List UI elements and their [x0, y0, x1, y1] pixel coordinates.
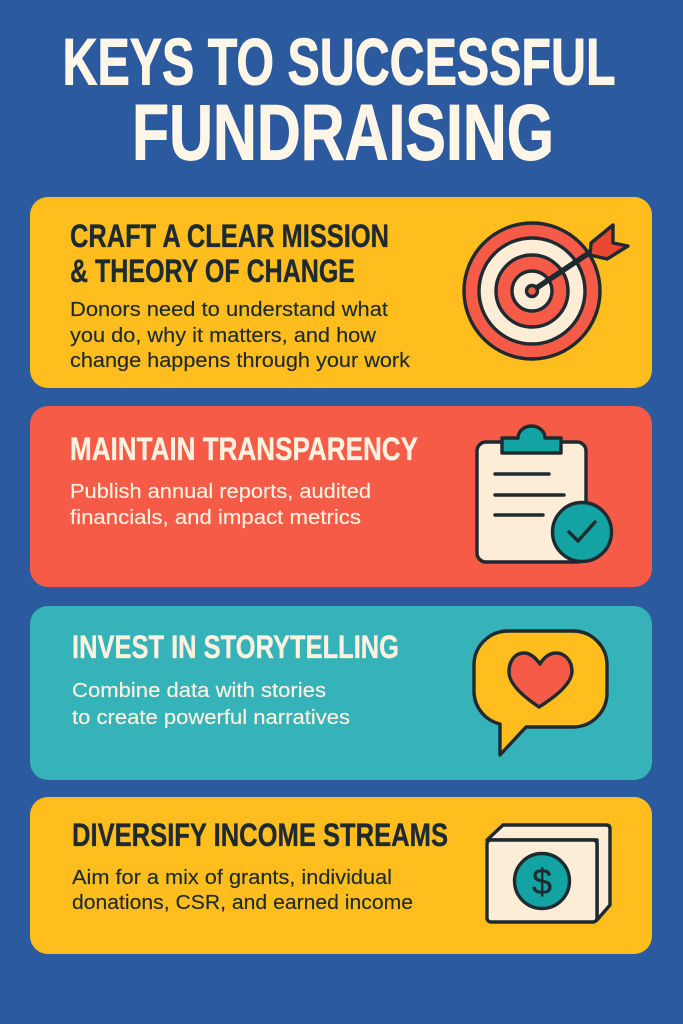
text: income streams description: Aim for a mix of grants, individual — [72, 867, 392, 889]
text: clear mission description: change happens through your work — [70, 350, 411, 372]
text: transparency description: financials, and impact metrics — [70, 507, 361, 529]
text: storytelling description: Combine data with stories — [72, 680, 326, 702]
panel: clear mission — [30, 197, 652, 388]
text: clear mission description: you do, why it matters, and how — [70, 325, 377, 347]
text: storytelling description: to create powerful narratives — [72, 707, 350, 729]
icon: clipboard with check — [477, 426, 612, 562]
text: storytelling description — [72, 680, 350, 729]
heading: clear mission: & THEORY OF CHANGE — [70, 253, 355, 289]
icon: speech bubble with heart — [474, 631, 607, 755]
text: income streams description: donations, CSR, and earned income — [72, 892, 413, 914]
heading: clear mission — [70, 218, 389, 289]
heading: clear mission: CRAFT A CLEAR MISSION — [70, 218, 389, 254]
panel: storytelling — [30, 606, 652, 780]
icon: banknote stack with dollar: $ — [532, 861, 552, 902]
panel: income streams — [30, 797, 652, 954]
icon: banknote stack with dollar — [487, 825, 610, 922]
text: clear mission description: Donors need to understand what — [70, 299, 388, 321]
text: transparency description — [70, 481, 371, 529]
heading: storytelling: INVEST IN STORYTELLING — [72, 629, 399, 665]
heading: transparency: MAINTAIN TRANSPARENCY — [70, 431, 418, 467]
text: income streams description — [72, 867, 413, 914]
text: clear mission description — [70, 299, 411, 372]
heading: income streams: DIVERSIFY INCOME STREAMS — [72, 817, 448, 853]
title — [62, 24, 616, 176]
text: transparency description: Publish annual reports, audited — [70, 481, 371, 503]
panel: transparency — [30, 406, 652, 587]
title: FUNDRAISING — [132, 88, 554, 176]
icon: target with arrow — [464, 223, 628, 359]
